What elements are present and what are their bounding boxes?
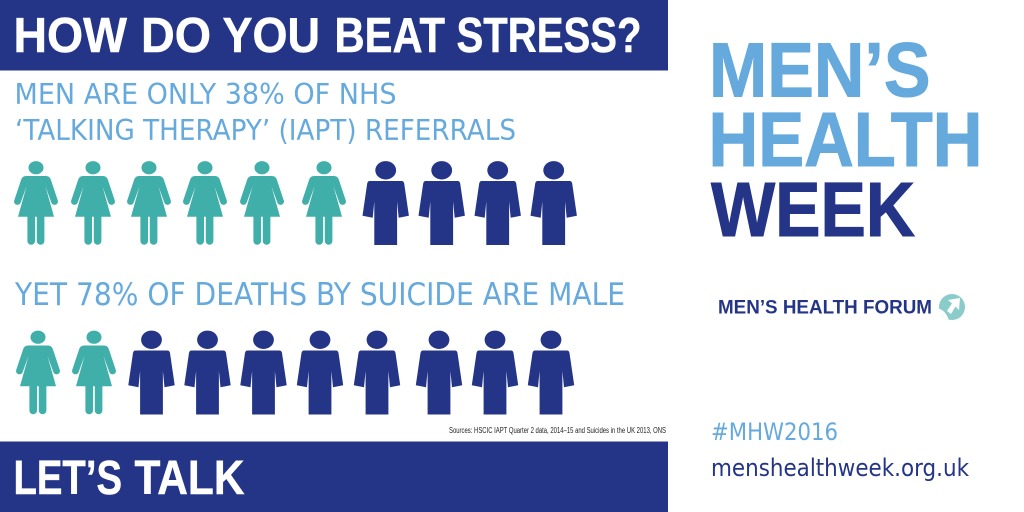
title banner (0, 0, 668, 70)
website: menshealthweek.org.uk (711, 454, 969, 482)
logo: Men's Health Forum: MEN’S HEALTH FORUM (718, 296, 932, 318)
title banner: YOU (222, 9, 320, 63)
pictogram: 6 women and 4 men referrals (14, 161, 577, 245)
title banner: STRESS? (456, 9, 642, 63)
logo: Men's Health Week: HEALTH (708, 97, 982, 183)
title banner: BEAT (334, 9, 445, 63)
heading: referrals statistic: MEN ARE ONLY 38% OF NHS (14, 78, 396, 111)
pictogram: 2 women and 8 men deaths (16, 331, 574, 414)
heading: referrals statistic: ‘TALKING THERAPY’ (IAPT) REFERRALS (15, 114, 516, 147)
bottom banner: LET’S (14, 452, 122, 505)
icon: forum arrow circle (937, 294, 965, 321)
bottom banner (0, 442, 668, 512)
title banner: HOW (14, 9, 128, 63)
sources note: Sources: HSCIC IAPT Quarter 2 data, 2014–15 and Suicides in the UK 2013, ONS (449, 426, 666, 435)
logo: Men's Health Week: WEEK (711, 167, 915, 253)
hashtag: #MHW2016 (711, 418, 838, 446)
title banner: DO (141, 9, 211, 63)
heading: suicide statistic: YET 78% OF DEATHS BY SUICIDE ARE MALE (14, 277, 625, 313)
heading: referrals statistic (14, 78, 516, 147)
logo: Men's Health Week: MEN’S (709, 28, 930, 114)
bottom banner: TALK (134, 452, 245, 505)
logo: Men's Health Week (708, 28, 982, 253)
